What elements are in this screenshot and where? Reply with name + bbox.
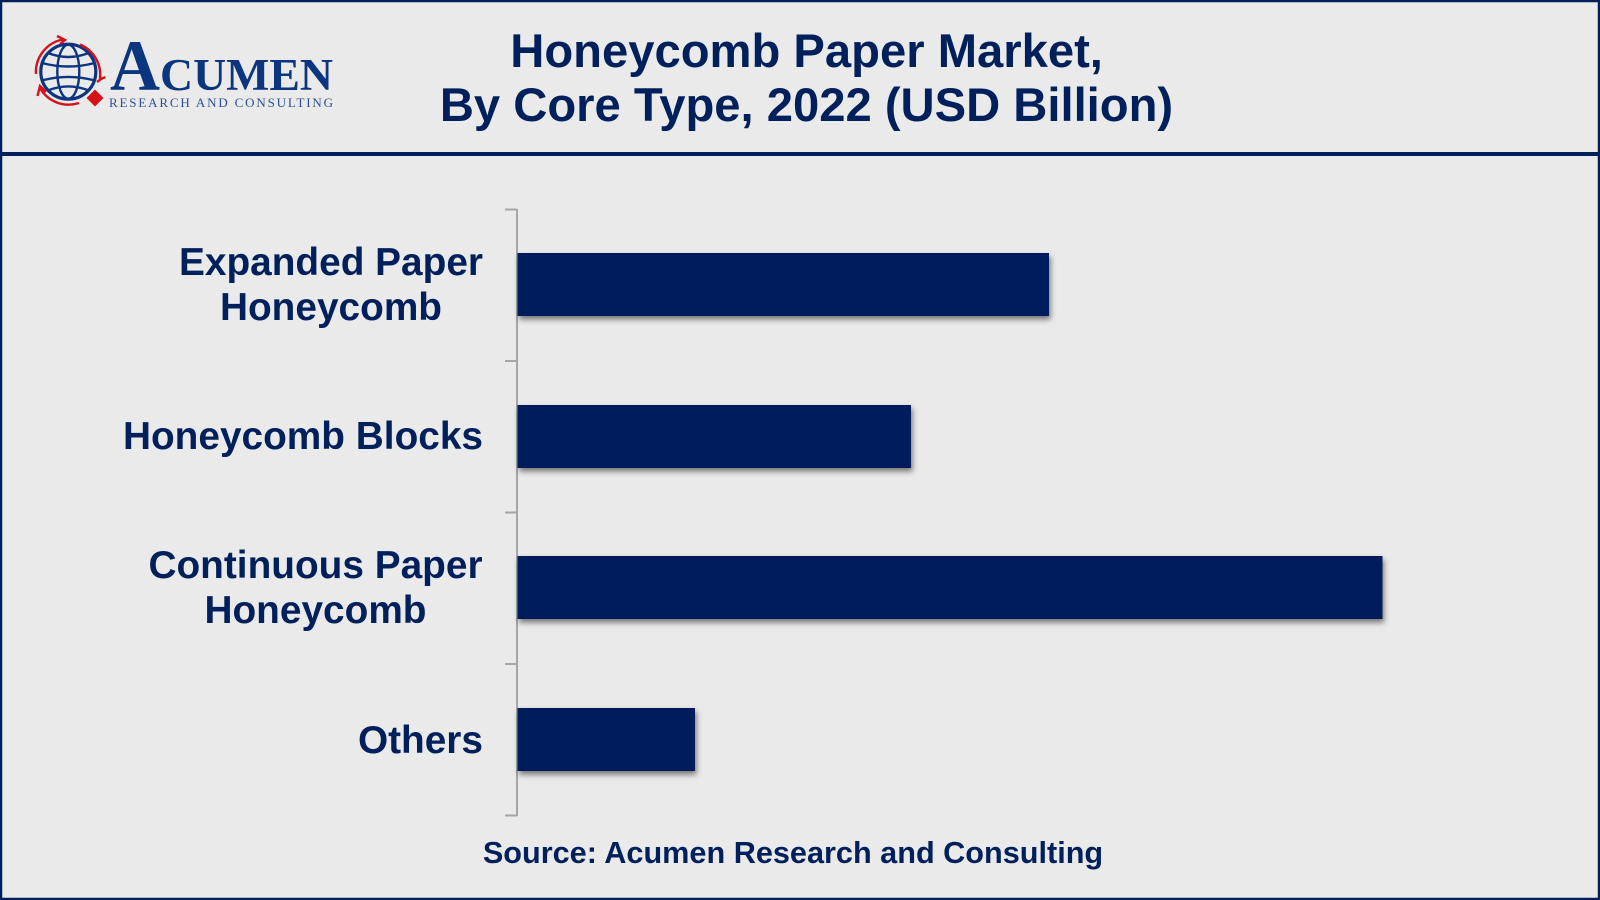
bar: Others — [518, 708, 695, 771]
bar: Honeycomb Blocks — [518, 405, 911, 468]
label: Continuous Paper Honeycomb — [148, 544, 483, 632]
label: Expanded Paper Honeycomb: Expanded Paper — [179, 241, 483, 284]
label: Continuous Paper Honeycomb: Continuous Paper — [148, 544, 483, 587]
bar: Continuous Paper Honeycomb — [518, 556, 1382, 619]
header divider — [0, 152, 1600, 156]
logo wordmark: A — [110, 26, 160, 106]
label: Expanded Paper Honeycomb: Honeycomb — [220, 286, 442, 329]
label: Continuous Paper Honeycomb: Honeycomb — [204, 589, 427, 632]
title: Honeycomb Paper Market, — [510, 25, 1103, 78]
chart axis — [505, 208, 518, 816]
bar: Expanded Paper Honeycomb — [518, 253, 1049, 316]
icon: globe with red arrows — [36, 36, 106, 106]
logo wordmark: CUMEN — [160, 50, 333, 100]
label: Others: Others — [358, 719, 483, 762]
bar chart — [123, 208, 1382, 816]
source note: Source: Acumen Research and Consulting — [483, 836, 1103, 870]
title: By Core Type, 2022 (USD Billion) — [440, 79, 1173, 132]
logo: Acumen Research and Consulting — [36, 26, 333, 110]
title — [440, 25, 1173, 132]
logo wordmark — [110, 26, 333, 106]
logo tagline: RESEARCH AND CONSULTING — [109, 95, 333, 110]
label: Honeycomb Blocks: Honeycomb Blocks — [123, 415, 483, 458]
label: Expanded Paper Honeycomb — [179, 241, 483, 329]
